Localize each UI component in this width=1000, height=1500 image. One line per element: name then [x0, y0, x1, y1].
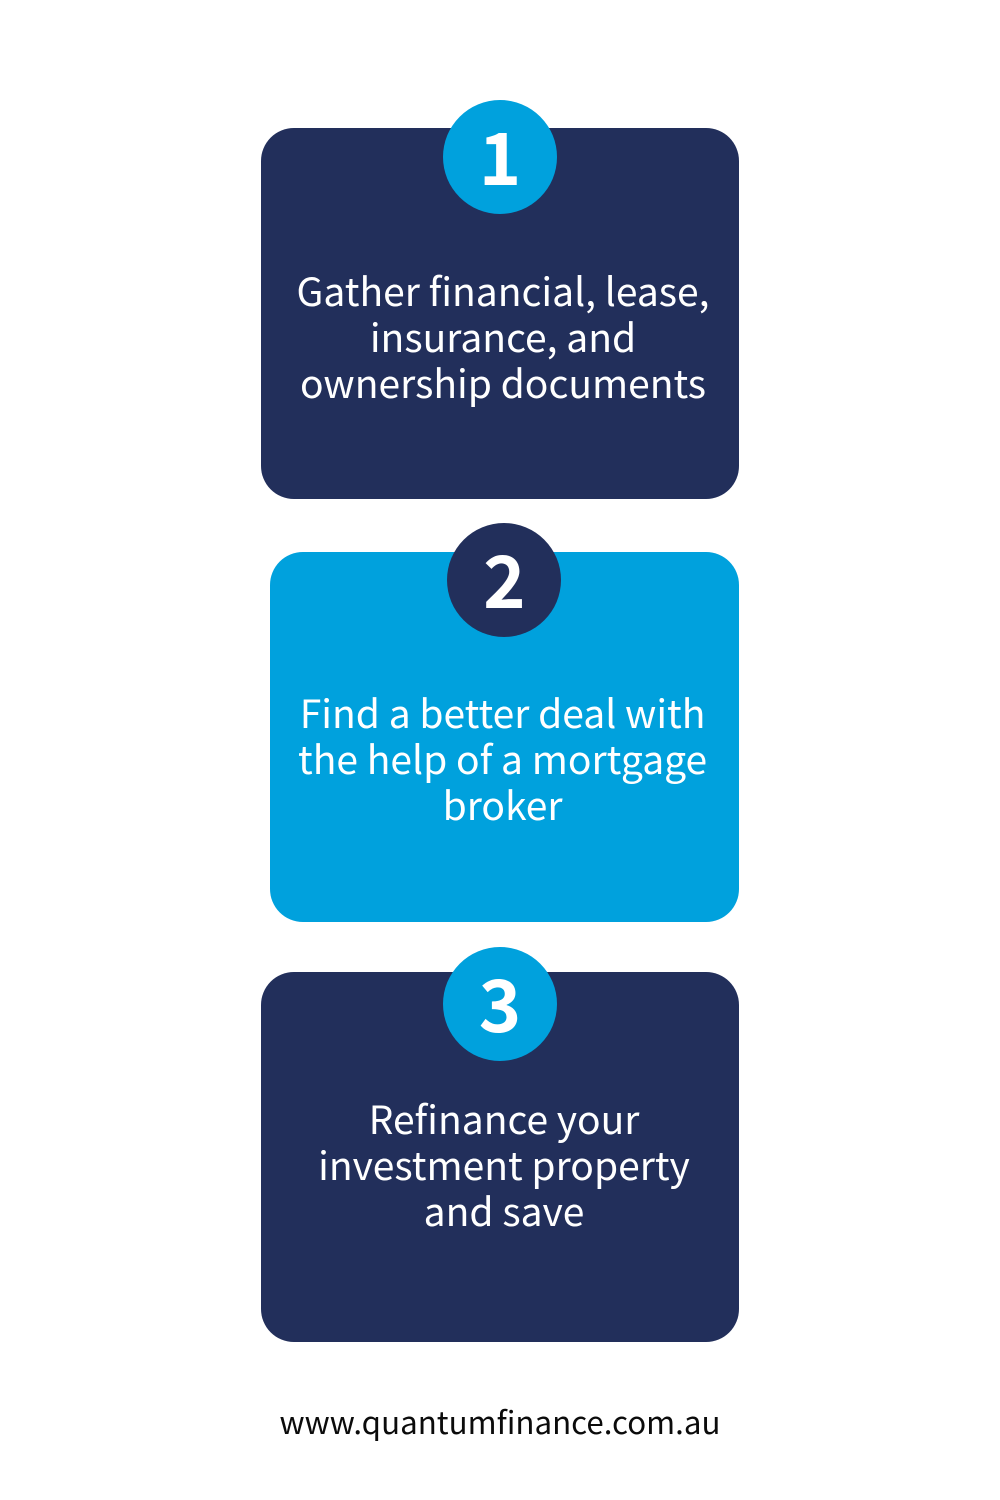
text: step 1 description: insurance, and: [370, 308, 636, 364]
icon: step 3 number badge: [443, 947, 557, 1061]
icon: step 1 number badge: [443, 100, 557, 214]
panel: step 3 card: [261, 972, 739, 1342]
text: step 2 description: [298, 684, 707, 832]
text: step 3 description: [318, 1090, 690, 1238]
text: step 3 description: Refinance your: [369, 1090, 639, 1146]
icon: step 3 number badge: 3: [479, 948, 521, 1053]
panel: step 1 card: [261, 128, 739, 499]
text: step 1 description: ownership documents: [300, 354, 706, 410]
icon: step 1 number badge: 1: [479, 101, 521, 206]
icon: step 2 number badge: [447, 523, 561, 637]
panel: step 2 card: [270, 552, 739, 922]
text: step 2 description: broker: [443, 776, 563, 832]
text: step 1 description: [296, 262, 709, 410]
icon: step 2 number badge: 2: [483, 524, 526, 629]
text: step 2 description: the help of a mortgage: [298, 730, 707, 786]
text: step 3 description: and save: [424, 1182, 584, 1238]
text: step 2 description: Find a better deal with: [300, 684, 705, 740]
footer: website URL: www.quantumfinance.com.au: [280, 1399, 720, 1444]
text: step 1 description: Gather financial, lease,: [296, 262, 709, 318]
text: step 3 description: investment property: [318, 1136, 690, 1192]
